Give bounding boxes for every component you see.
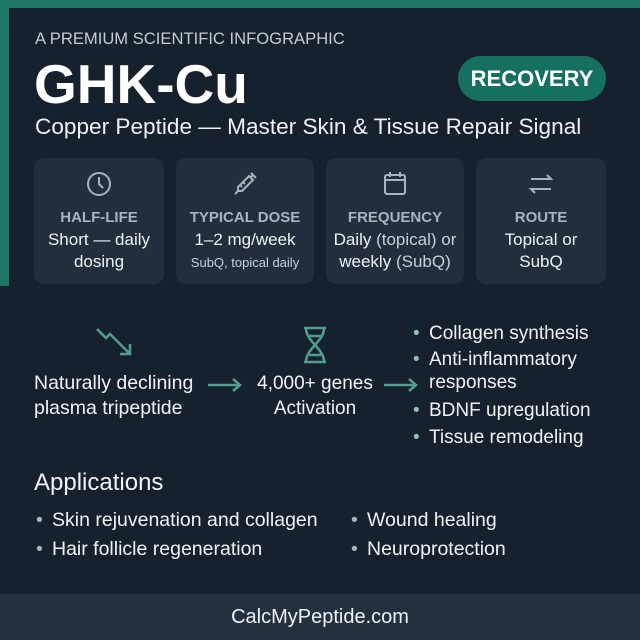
effects list: Collagen synthesis [429, 323, 588, 344]
card: typical dose: TYPICAL DOSE [190, 209, 300, 226]
card: half-life: Short — daily [48, 230, 150, 249]
footer [0, 594, 640, 640]
card: half-life: HALF-LIFE [60, 209, 138, 226]
icon: dna [304, 326, 326, 364]
card: typical dose [176, 158, 314, 284]
effects list: • [413, 400, 420, 421]
teal frame top [0, 0, 640, 8]
card: frequency [326, 158, 464, 284]
effects list: • [413, 427, 420, 448]
text: naturally declining: plasma tripeptide [34, 397, 182, 419]
eyebrow: A PREMIUM SCIENTIFIC INFOGRAPHIC [35, 29, 345, 48]
applications list: • [351, 538, 358, 560]
card: frequency: Daily (topical) or [334, 230, 456, 249]
card: frequency: FREQUENCY [348, 209, 442, 226]
icon: declining trend [96, 328, 132, 356]
text: naturally declining: Naturally declining [34, 372, 193, 394]
title: GHK-Cu [34, 53, 248, 115]
teal frame left [0, 0, 9, 286]
card: route [476, 158, 606, 284]
effects list: Anti-inflammatory [429, 349, 577, 370]
effects list: Tissue remodeling [429, 427, 584, 448]
card: typical dose: SubQ, topical daily [191, 255, 299, 270]
applications list: • [36, 509, 43, 531]
effects list [413, 323, 591, 448]
card: half-life [34, 158, 164, 284]
icon: clock [87, 172, 111, 196]
card: route: ROUTE [515, 209, 567, 226]
text: genes activation [257, 373, 373, 419]
card: route: Topical or [505, 230, 577, 249]
effects list: • [413, 349, 420, 370]
applications list: • [351, 509, 358, 531]
icon: calendar [384, 172, 406, 195]
card: typical dose: 1–2 mg/week [194, 230, 296, 249]
effects list: BDNF upregulation [429, 400, 591, 421]
effects list: responses [429, 372, 517, 393]
card: route: SubQ [519, 252, 563, 271]
arrow 2 [384, 378, 418, 392]
arrow 1 [208, 378, 242, 392]
text: genes activation: 4,000+ genes [257, 373, 373, 394]
subtitle: Copper Peptide — Master Skin & Tissue Repair Signal [35, 114, 581, 139]
heading: applications: Applications [34, 469, 163, 496]
text: genes activation: Activation [274, 398, 356, 419]
applications list: • [36, 538, 43, 560]
badge: recovery [458, 56, 606, 101]
icon: syringe [234, 172, 257, 195]
applications list: Neuroprotection [367, 538, 506, 560]
effects list: • [413, 323, 420, 344]
badge: recovery: RECOVERY [471, 66, 593, 91]
applications list [36, 509, 506, 560]
card: half-life: dosing [74, 252, 124, 271]
applications list: Skin rejuvenation and collagen [52, 509, 318, 531]
icon: swap arrows [528, 174, 554, 194]
card: frequency: weekly (SubQ) [339, 252, 451, 271]
applications list: Hair follicle regeneration [52, 538, 262, 560]
applications list: Wound healing [367, 509, 497, 531]
footer: CalcMyPeptide.com [231, 606, 409, 628]
text: naturally declining [34, 372, 193, 419]
